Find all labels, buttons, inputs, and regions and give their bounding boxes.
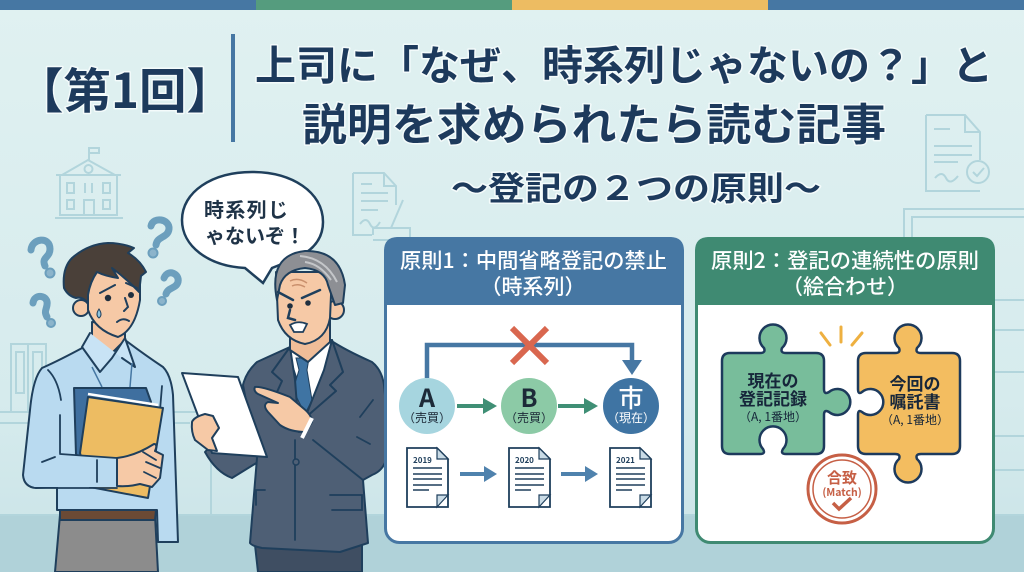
node A: [399, 378, 455, 434]
belt: [60, 510, 156, 520]
document 2019: [407, 448, 448, 507]
jacket folds: [256, 400, 373, 540]
document 2021: 2021: [616, 455, 635, 466]
hair: [64, 243, 146, 303]
node B: （売買）: [505, 409, 553, 426]
document 2020: 2020: [515, 455, 534, 466]
icon: certified document: [926, 115, 989, 191]
document 2019: 2019: [413, 455, 432, 466]
icon: red cross: [512, 328, 547, 363]
neck and head: [92, 322, 125, 360]
face details: [278, 279, 320, 332]
top colour band: [0, 0, 1024, 10]
node city: 市: [618, 379, 644, 415]
icon: school building: [55, 148, 123, 218]
panel 1 heading: 原則1：中間省略登記の禁止: [400, 245, 667, 275]
node B: [501, 378, 557, 434]
node B: B: [520, 379, 538, 415]
panel 2 heading: 原則2：登記の連続性の原則: [711, 245, 979, 275]
shirt: [23, 340, 178, 542]
stamp: match: (Match): [822, 485, 862, 500]
hair: [275, 251, 345, 305]
character: angry boss: [182, 251, 387, 572]
arrow: direct transfer path: [427, 345, 642, 378]
panel 1 header: [384, 237, 684, 305]
document 2021: [610, 448, 651, 507]
puzzle piece: current registry: （A, 1番地）: [739, 408, 807, 425]
title line 2: 説明を求められたら読む記事: [302, 89, 886, 153]
node city: （現在）: [607, 409, 655, 426]
icon: match rays: [821, 327, 862, 345]
character: young employee: [23, 243, 178, 572]
speech bubble: 時系列じ: [204, 194, 288, 223]
arrow: 2019 to 2020: [460, 466, 497, 482]
shirt cuff: [302, 418, 312, 438]
tie: [293, 358, 312, 414]
left hand: [192, 414, 219, 451]
panel 2 header: [695, 237, 995, 305]
pointing hand: [254, 387, 312, 432]
icon: document with pen: [353, 173, 410, 240]
arrow: A to B: [457, 398, 497, 414]
speech bubble: [182, 172, 323, 283]
trousers: [55, 515, 158, 572]
jacket: [243, 340, 387, 552]
speech bubble: ゃないぞ！: [205, 220, 305, 249]
panel: principle 2: [695, 237, 995, 542]
episode label: 【第1回】: [16, 52, 234, 122]
puzzle piece: current registry: 登記記録: [739, 385, 807, 410]
shirt: [290, 340, 335, 414]
document 2020: [509, 448, 550, 507]
forearm and hand: [34, 444, 163, 488]
stamp: match: 合致: [827, 467, 857, 488]
arrow: 2020 to 2021: [561, 466, 598, 482]
collar and lanyard: [82, 333, 135, 372]
left sleeve: [205, 385, 258, 478]
panel: principle 1: [384, 237, 684, 542]
title line 1: 上司に「なぜ、時系列じゃないの？」と: [255, 32, 993, 92]
puzzle piece: commission document: 今回の: [890, 370, 940, 395]
puzzle piece: commission document: （A, 1番地）: [881, 411, 949, 428]
trousers: [255, 545, 362, 572]
node city: [603, 378, 659, 434]
node A: A: [418, 379, 436, 415]
shirt folds: [42, 370, 162, 462]
panel 1 subheading: （時系列）: [480, 271, 586, 301]
puzzle piece: current registry: [722, 324, 850, 454]
arrow: B to city: [558, 398, 598, 414]
title divider: [231, 34, 235, 142]
puzzle piece: commission document: [858, 324, 960, 483]
face details: [97, 283, 137, 322]
panel 2 subheading: （絵合わせ）: [782, 271, 908, 301]
neck and head: [290, 320, 330, 362]
subtitle: ～登記の２つの原則～: [451, 162, 821, 210]
stamp: match: [808, 455, 876, 523]
icon: question marks: [31, 220, 178, 327]
lapels: [272, 340, 343, 432]
folders: [74, 388, 163, 498]
puzzle piece: current registry: 現在の: [748, 367, 798, 392]
node A: （売買）: [403, 409, 451, 426]
paper: [182, 373, 267, 457]
puzzle piece: commission document: 嘱託書: [890, 388, 940, 413]
